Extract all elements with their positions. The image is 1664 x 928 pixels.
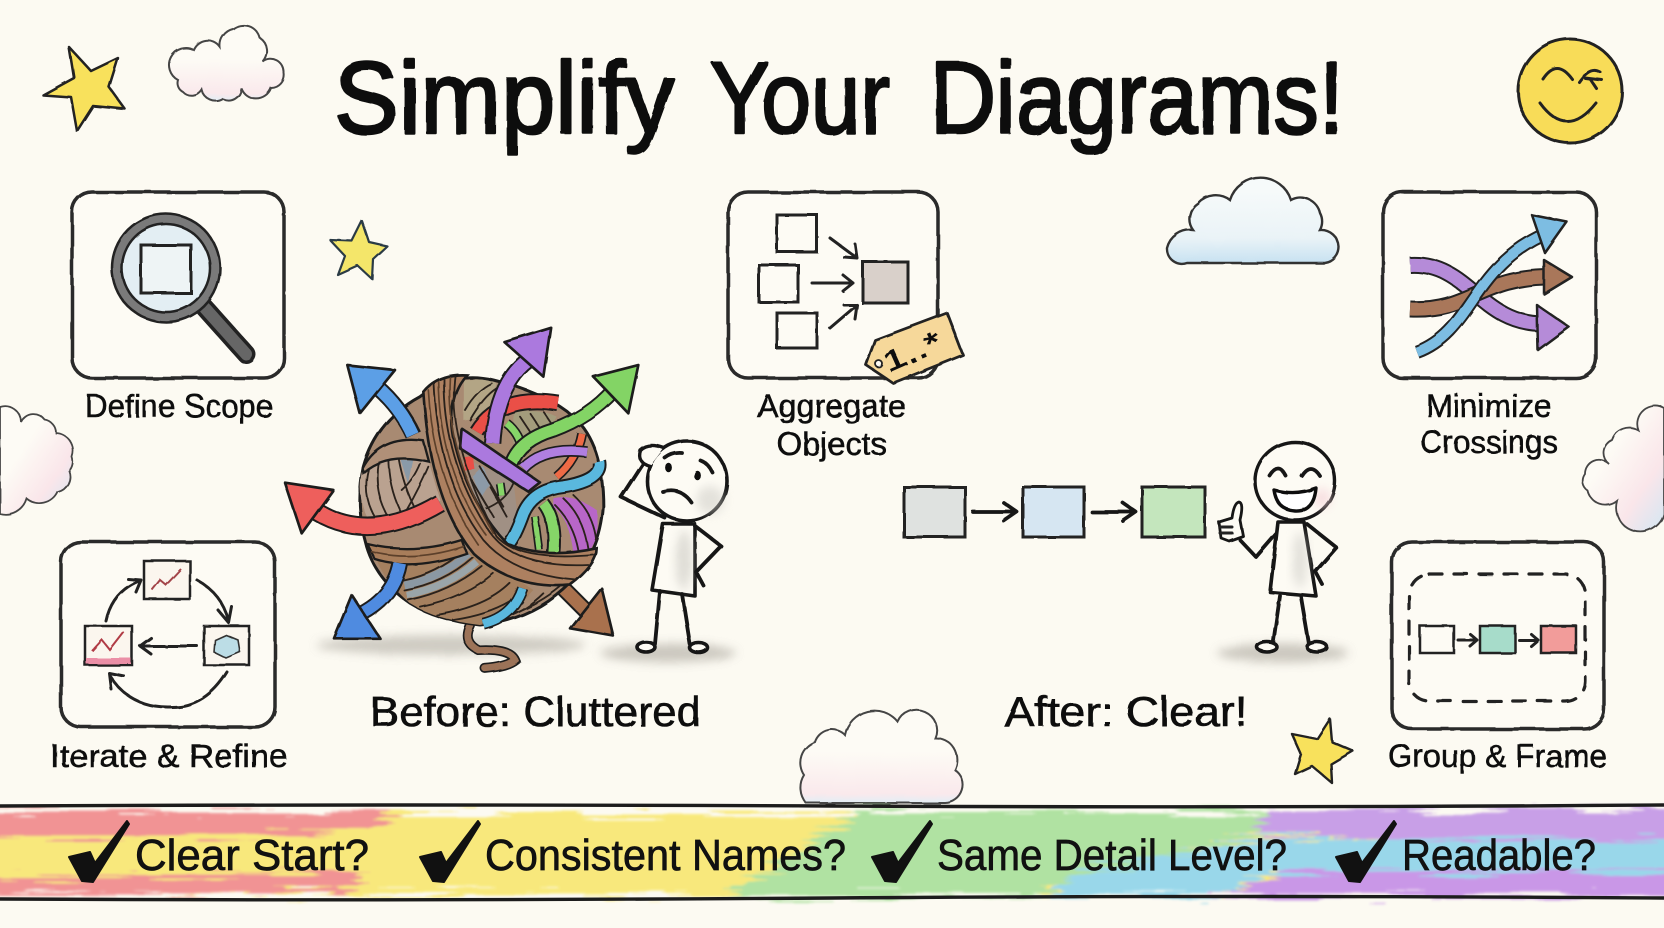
label: minimize crossings: Crossings	[1420, 424, 1558, 460]
label: minimize crossings	[1420, 388, 1558, 460]
yarn body base	[360, 377, 603, 625]
label: after clear: After: Clear!	[1004, 688, 1248, 735]
yarn red strand	[468, 401, 558, 470]
icon: thumb up	[1219, 502, 1243, 541]
band bottom rule	[0, 896, 1664, 900]
arrow: red left	[285, 483, 440, 533]
yarn main brown strand	[423, 375, 597, 586]
arrow: blue down-left	[334, 563, 400, 638]
icon: framed group	[1409, 574, 1585, 701]
crayon rainbow band	[0, 810, 1664, 896]
yarn blue strand lower	[483, 588, 523, 624]
panel: aggregate objects	[728, 192, 963, 383]
label: group and frame: Group & Frame	[1388, 738, 1607, 774]
check item: readable	[1336, 821, 1596, 882]
yarn purple long strand	[460, 428, 540, 492]
icon: hand on head	[639, 445, 664, 466]
icon: refine cycle	[85, 561, 249, 707]
arrow: blue up-left	[347, 365, 413, 435]
icon: magnifying glass	[112, 214, 246, 354]
icon: smiley face winking	[1518, 39, 1622, 143]
arrow: green up-right	[512, 365, 638, 463]
arrow: purple up	[493, 327, 551, 443]
label: aggregate objects	[757, 388, 906, 462]
yarn magenta strands right	[553, 495, 598, 553]
panel: group and frame	[1392, 542, 1604, 729]
panel: define scope	[72, 192, 284, 378]
icon: star near group and frame	[1292, 719, 1353, 783]
yarn upper olive strands	[463, 379, 557, 443]
panel: minimize crossings	[1383, 192, 1596, 378]
yarn left brown arc	[363, 440, 429, 473]
band top rule	[0, 805, 1664, 807]
check item: consistent names	[420, 821, 846, 882]
icon: blue cloud	[1167, 178, 1339, 264]
title: Simplify	[334, 41, 674, 155]
diagram: clean flow of three boxes	[904, 487, 1205, 537]
label: aggregate objects: Aggregate	[757, 388, 906, 424]
yarn orange strand	[557, 433, 582, 477]
icon: multiplicity tag: 1..*	[879, 326, 947, 379]
yarn lower wraps	[377, 550, 560, 625]
icon: small star	[330, 221, 387, 279]
icon: pink cloud right edge	[1583, 405, 1664, 532]
icon: yellow star top left	[43, 47, 125, 131]
arrow: brown down-right	[560, 585, 613, 636]
panel: iterate and refine	[61, 542, 275, 727]
yarn left fan strands	[360, 453, 440, 524]
label: iterate and refine: Iterate & Refine	[50, 738, 288, 774]
label: define scope: Define Scope	[85, 388, 273, 424]
yarn green small strand	[500, 423, 523, 495]
check item: clear start	[69, 821, 369, 882]
label: before cluttered: Before: Cluttered	[370, 688, 701, 735]
icon: many boxes into one	[759, 215, 908, 348]
illustration: tangled yarn ball with arrows	[285, 327, 638, 668]
checklist banner	[0, 805, 1664, 900]
yarn blue strand upper	[508, 462, 600, 544]
icon: multiplicity tag	[866, 313, 963, 383]
icon: pink cloud left edge	[0, 406, 73, 515]
check item: same detail level: Same Detail Level?	[937, 831, 1287, 880]
character: confused stick figure	[600, 441, 736, 662]
icon: pink cloud bottom centre	[800, 710, 963, 803]
yarn middle strands	[467, 460, 520, 537]
check item: readable: Readable?	[1402, 831, 1596, 880]
check item: consistent names: Consistent Names?	[485, 831, 846, 880]
ground shadow under yarn	[316, 635, 586, 655]
title: Diagrams!	[930, 41, 1344, 155]
check item: same detail level	[872, 821, 1287, 882]
character: happy stick figure with thumbs up	[1217, 442, 1349, 662]
icon: crossing arrows	[1410, 215, 1572, 352]
label: minimize crossings: Minimize	[1426, 388, 1552, 424]
label: aggregate objects: Objects	[777, 426, 887, 462]
title: Your	[710, 41, 890, 155]
yarn green strand lower	[535, 503, 554, 553]
title	[334, 41, 1344, 155]
check item: clear start: Clear Start?	[135, 831, 369, 880]
yarn cross band left	[367, 540, 467, 564]
icon: pink cloud top left	[169, 25, 284, 101]
yarn tail	[467, 625, 515, 668]
yarn purple short strand	[523, 451, 587, 468]
